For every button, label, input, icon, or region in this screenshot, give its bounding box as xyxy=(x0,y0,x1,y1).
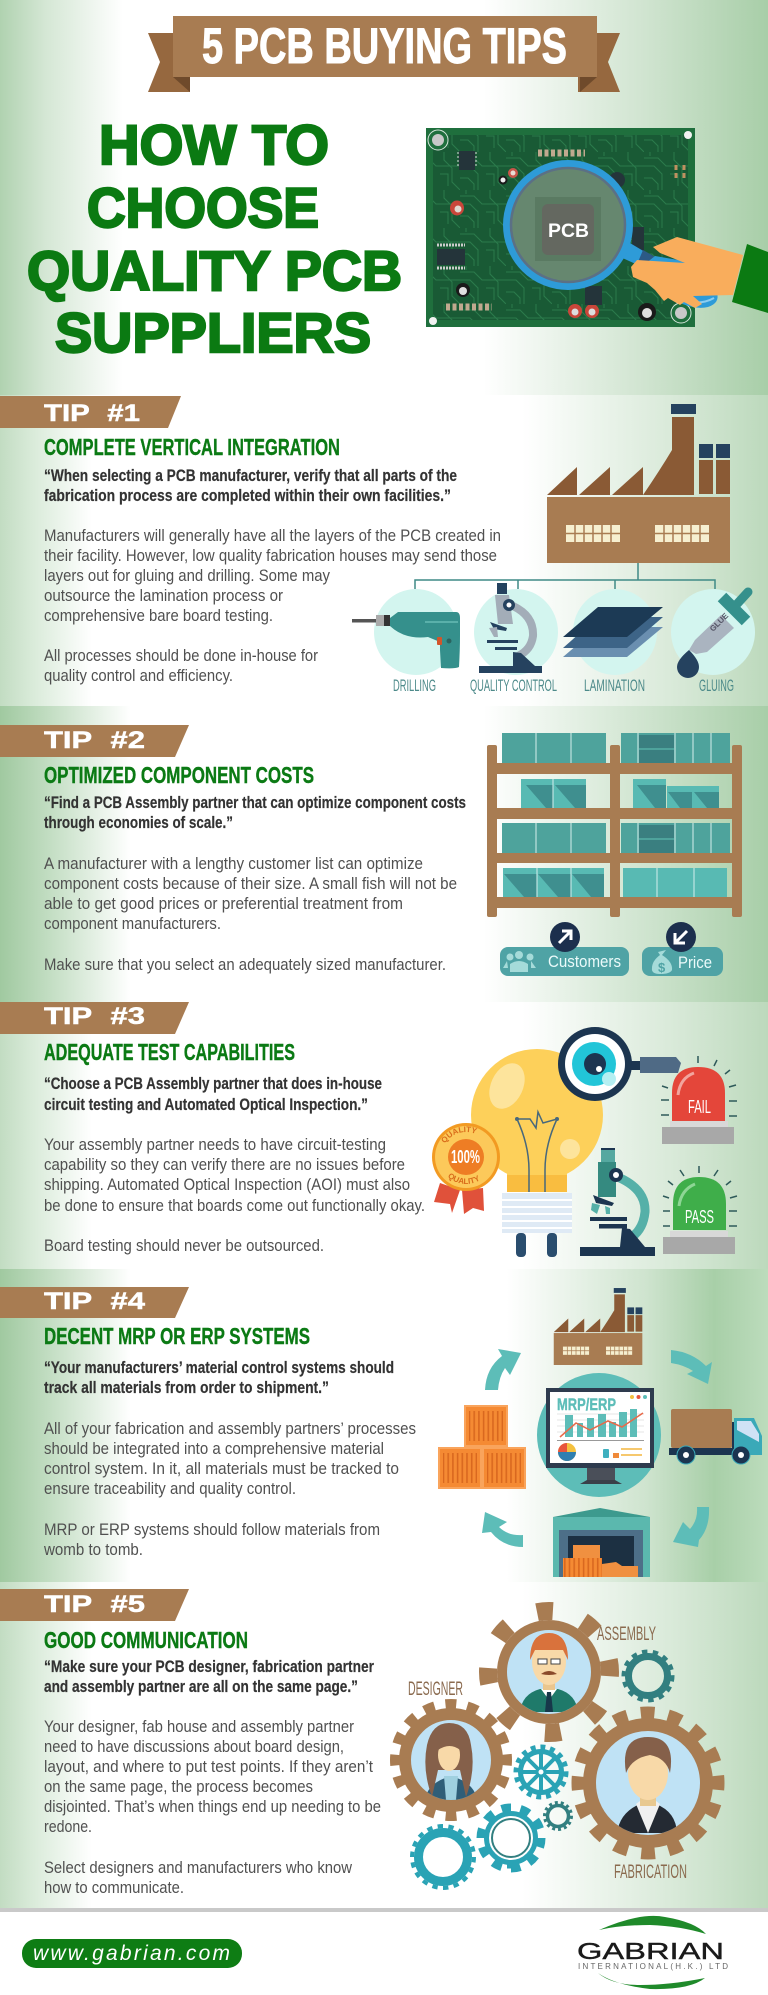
tip 2 label xyxy=(0,725,189,757)
process labels: GLUING xyxy=(699,676,734,695)
tip 5 body: how to communicate. xyxy=(44,1879,184,1897)
main title xyxy=(27,113,402,364)
tip 3 heading: ADEQUATE TEST CAPABILITIES xyxy=(44,1039,295,1065)
icon: microscope xyxy=(479,583,542,673)
tip 1 body: quality control and efficiency. xyxy=(44,667,233,685)
tip 3 label: TIP #3 xyxy=(44,1003,145,1030)
tip 1 quote xyxy=(44,466,457,505)
website pill: www.gabrian.com xyxy=(33,1942,230,1965)
icon: pass alarm: PASS xyxy=(685,1207,714,1227)
tip 2 heading: OPTIMIZED COMPONENT COSTS xyxy=(44,762,314,788)
tip 5 xyxy=(0,1589,718,1897)
price button: $ xyxy=(658,960,666,975)
icon: light bulb xyxy=(471,1049,603,1257)
tip 2 quote: “Find a PCB Assembly partner that can optimize component costs xyxy=(44,793,466,812)
tip 3 quote: circuit testing and Automated Optical Inspection.” xyxy=(44,1095,368,1114)
tip 3 quote xyxy=(44,1074,382,1114)
icon: quality badge: 100% xyxy=(451,1147,480,1167)
tip 4 body: All of your fabrication and assembly partners’ processes xyxy=(44,1420,416,1438)
icon: quality badge: QUALITY xyxy=(442,1126,478,1142)
tip 3 body: capability so they can verify there are no issues before xyxy=(44,1156,405,1174)
ribbon banner xyxy=(148,16,620,92)
tip 1 label: TIP #1 xyxy=(44,400,140,427)
icon: quality badge xyxy=(432,1123,500,1214)
tip 3 label xyxy=(0,1002,189,1034)
tip 5 label xyxy=(0,1589,189,1621)
tip 4 body: womb to tomb. xyxy=(43,1541,143,1559)
cycle arrows xyxy=(482,1349,712,1547)
hand xyxy=(631,237,743,308)
icon: fail alarm xyxy=(661,1056,737,1144)
tip 4 heading: DECENT MRP OR ERP SYSTEMS xyxy=(44,1323,310,1349)
tip 5 label: TIP #5 xyxy=(44,1591,145,1618)
illustration: MRP/ERP monitor xyxy=(537,1373,661,1497)
illustration: MRP/ERP monitor: MRP/ERP xyxy=(557,1395,616,1414)
tip 1 label xyxy=(0,396,181,428)
tip 5 body: on the same page, the process becomes xyxy=(44,1778,313,1796)
gear labels xyxy=(408,1624,687,1883)
icon: small factory xyxy=(554,1288,642,1365)
tip 2 quote: through economies of scale.” xyxy=(44,813,233,832)
icon: glue xyxy=(677,592,748,678)
small gears xyxy=(412,1652,672,1888)
tip 1 xyxy=(0,396,755,695)
tip 5 heading: GOOD COMMUNICATION xyxy=(44,1627,248,1653)
tip 1 body: Manufacturers will generally have all the layers of the PCB created in xyxy=(44,527,501,545)
icon: fail alarm: FAIL xyxy=(688,1097,711,1117)
tip 5 quote: “Make sure your PCB designer, fabrication partner xyxy=(44,1657,374,1676)
icon: glue: GLUE xyxy=(708,611,731,633)
tip 1 quote: “When selecting a PCB manufacturer, verify that all parts of the xyxy=(44,466,457,485)
price button xyxy=(642,922,723,976)
tip 1 body: their facility. However, low quality fabrication houses may send those xyxy=(44,547,497,565)
tip 4 label: TIP #4 xyxy=(44,1288,146,1315)
tip 2 body: component manufacturers. xyxy=(44,915,221,933)
tip 2 label: TIP #2 xyxy=(44,727,145,754)
tip 5 body: Select designers and manufacturers who know xyxy=(44,1859,352,1877)
main title: QUALITY PCB xyxy=(27,239,402,302)
tip 3 body: Board testing should never be outsourced. xyxy=(44,1237,324,1255)
tip 2 body: Make sure that you select an adequately sized manufacturer. xyxy=(44,956,446,974)
icon: containers xyxy=(438,1405,526,1489)
main title: CHOOSE xyxy=(87,176,319,239)
tip 1 heading: COMPLETE VERTICAL INTEGRATION xyxy=(44,434,340,460)
price button: Price xyxy=(678,953,712,972)
gear labels: ASSEMBLY xyxy=(597,1624,656,1645)
tip 4 body: ensure traceability and quality control. xyxy=(44,1480,296,1498)
icon: drill xyxy=(352,612,460,668)
magnifier lens xyxy=(506,164,630,286)
icon: warehouse xyxy=(553,1508,650,1577)
tip 4 body xyxy=(43,1420,416,1559)
tip 4 quote: “Your manufacturers’ material control systems should xyxy=(44,1358,394,1377)
process circles xyxy=(374,589,755,675)
tip 1 body: outsource the lamination process or xyxy=(44,587,283,605)
tip 4 xyxy=(0,1287,762,1577)
tip 3 xyxy=(0,1002,738,1257)
logo: INTERNATIONAL(H.K.) LTD xyxy=(578,1962,728,1971)
tip 4 body: should be integrated into a comprehensive material xyxy=(44,1440,384,1458)
tip 5 body: layout, and where to put test points. If they aren’t xyxy=(44,1758,373,1776)
tip 1 quote: fabrication process are completed within their own facilities.” xyxy=(44,486,451,505)
process labels xyxy=(393,676,734,695)
tip 1 body: layers out for gluing and drilling. Some may xyxy=(44,567,331,585)
tip 2 body: A manufacturer with a lengthy customer list can optimize xyxy=(44,855,423,873)
tip 5 body xyxy=(44,1718,381,1897)
process labels: LAMINATION xyxy=(584,676,645,695)
tip 3 body xyxy=(44,1136,425,1255)
tip 3 quote: “Choose a PCB Assembly partner that does in-house xyxy=(44,1074,382,1093)
illustration: circuit board with magnifier and hand xyxy=(426,128,768,327)
icon: pass alarm xyxy=(663,1166,737,1254)
tip 1 body: All processes should be done in-house for xyxy=(44,647,318,665)
tip 4 label xyxy=(0,1287,189,1318)
tip 2 xyxy=(0,725,742,976)
main title: HOW TO xyxy=(99,113,329,176)
magnifier handle xyxy=(618,240,718,308)
tip 5 body: need to have discussions about board design, xyxy=(44,1738,344,1756)
tip 5 body: disjointed. That’s when things end up needing to be xyxy=(44,1798,381,1816)
tip 4 body: MRP or ERP systems should follow materials from xyxy=(44,1521,380,1539)
icon: lamination layers xyxy=(563,607,663,657)
logo: GABRIAN xyxy=(577,1938,724,1964)
gear: assembly xyxy=(488,1611,610,1733)
connector lines xyxy=(415,563,715,589)
illustration: warehouse shelves xyxy=(487,733,742,917)
process labels: QUALITY CONTROL xyxy=(470,676,557,695)
gear: fabrication xyxy=(578,1713,718,1853)
process labels: DRILLING xyxy=(393,676,436,695)
icon: microscope xyxy=(580,1148,655,1256)
hand sleeve xyxy=(732,244,768,313)
banner title: 5 PCB BUYING TIPS xyxy=(202,18,567,74)
tip 2 quote xyxy=(44,793,466,832)
footer xyxy=(22,1916,728,1989)
tip 4 body: control system. In it, all materials must be tracked to xyxy=(44,1460,399,1478)
gear labels: FABRICATION xyxy=(614,1862,687,1883)
tip 5 quote: and assembly partner are all on the same page.” xyxy=(44,1677,358,1696)
tip 2 body: able to get good prices or preferential treatment from xyxy=(44,895,403,913)
gear labels: DESIGNER xyxy=(408,1679,463,1700)
icon: factory xyxy=(547,404,730,563)
gear: designer xyxy=(395,1704,507,1816)
tip 4 quote: track all materials from order to shipment.” xyxy=(44,1378,329,1397)
tip 3 body: Your assembly partner needs to have circuit-testing xyxy=(44,1136,386,1154)
illustration: circuit board with magnifier and hand: PCB xyxy=(548,221,589,242)
icon: quality badge: QUALITY xyxy=(448,1174,478,1184)
tip 3 body: be done to ensure that boards come out functionally okay. xyxy=(44,1197,425,1215)
customers button: Customers xyxy=(548,952,621,971)
tip 5 quote xyxy=(44,1657,374,1696)
main title: SUPPLIERS xyxy=(55,301,371,364)
icon: magnifier eye xyxy=(558,1027,681,1101)
tip 5 body: redone. xyxy=(44,1818,92,1836)
tip 1 body: comprehensive bare board testing. xyxy=(44,607,273,625)
tip 2 body: component costs because of their size. A small fish will not be xyxy=(44,875,457,893)
tip 1 body xyxy=(44,527,501,685)
tip 2 body xyxy=(44,855,457,974)
tip 5 body: Your designer, fab house and assembly partner xyxy=(44,1718,354,1736)
logo xyxy=(577,1916,728,1989)
icon: truck xyxy=(669,1409,762,1464)
tip 4 quote xyxy=(44,1358,394,1397)
tip 3 body: shipping. Automated Optical Inspection (AOI) must also xyxy=(44,1176,410,1194)
customers button xyxy=(500,922,629,976)
